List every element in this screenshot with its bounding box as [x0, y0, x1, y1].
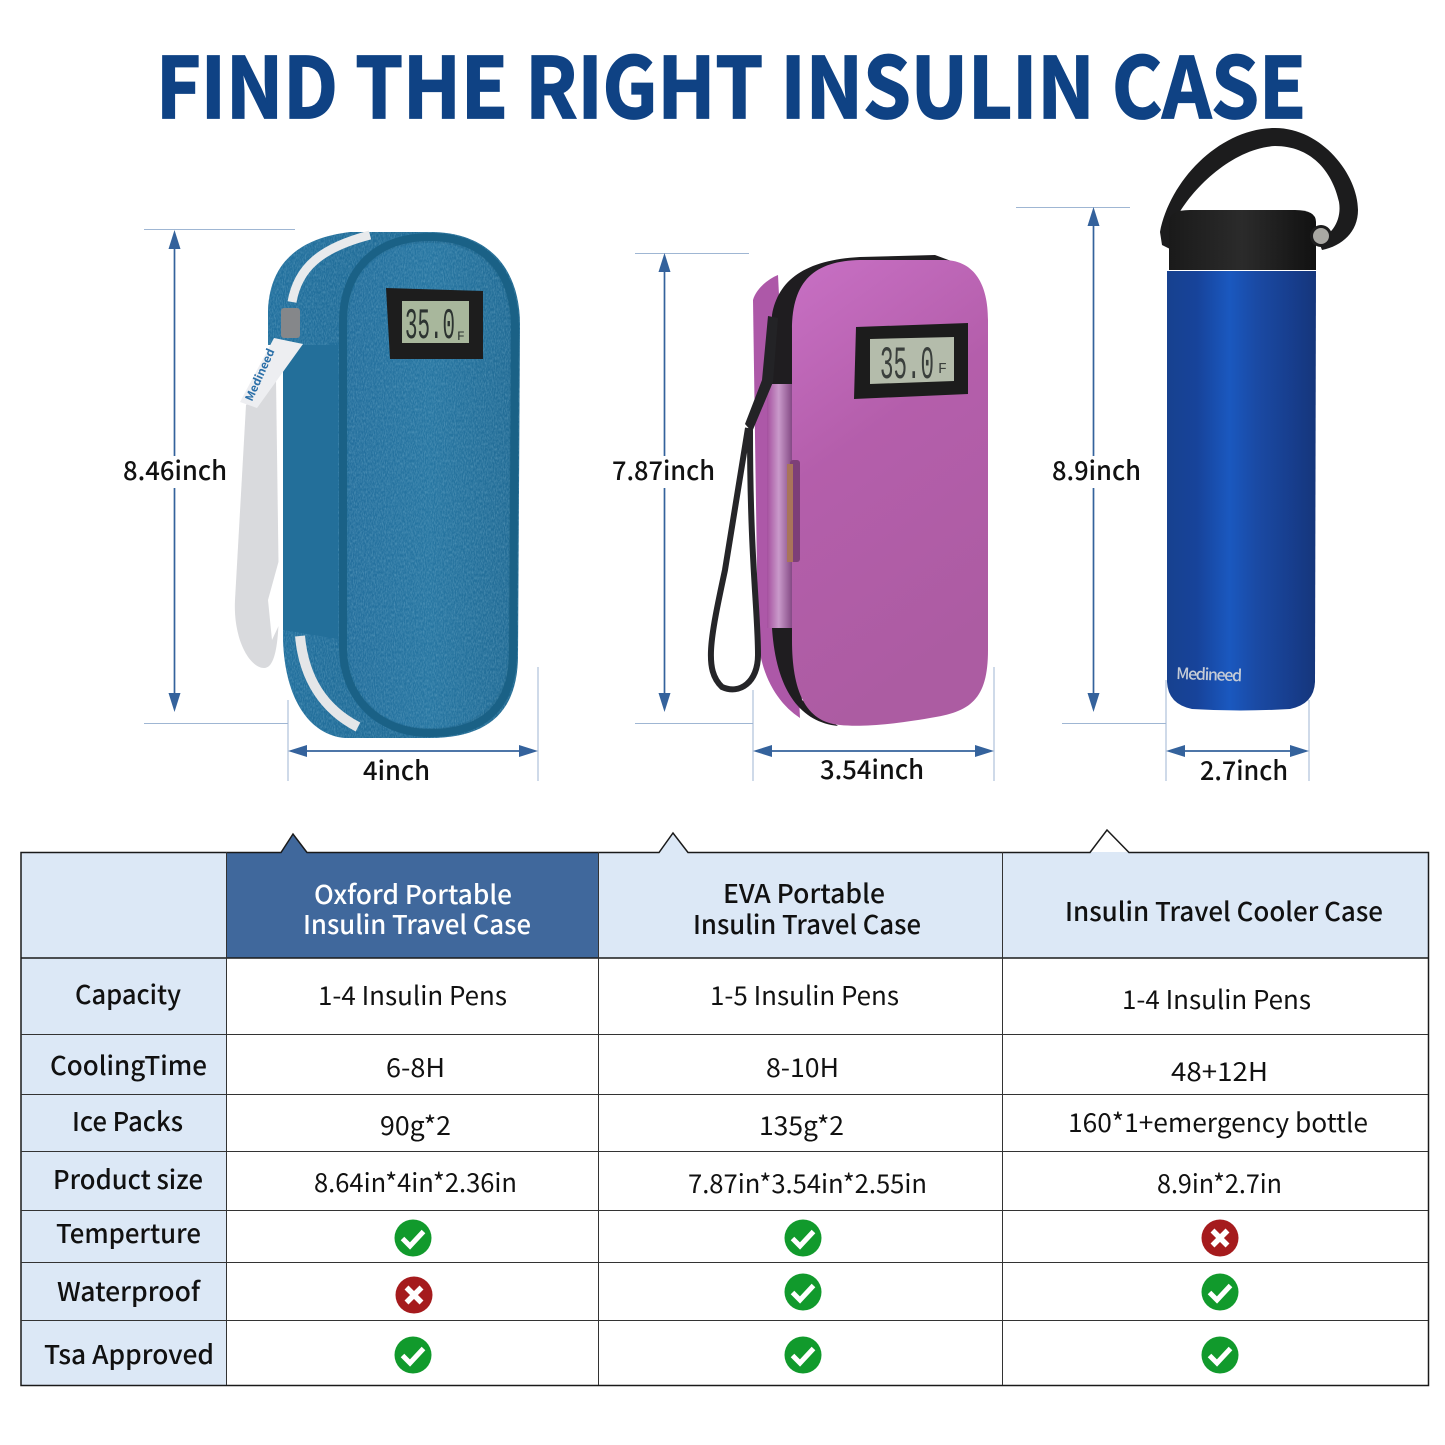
width arrow	[763, 750, 984, 752]
row: waterproof	[57, 1272, 1238, 1314]
handle	[1160, 128, 1358, 250]
title: FIND THE RIGHT INSULIN CASE	[156, 22, 1306, 143]
dimensions: blue oxford case	[123, 230, 538, 788]
thermometer: 35.0	[880, 340, 934, 392]
width label: 2.7inch	[1200, 751, 1288, 788]
row: capacity	[75, 975, 1311, 1017]
row: cooling time: 8-10H	[766, 1048, 839, 1085]
product: blue oxford case	[235, 228, 524, 742]
row: cooling time: CoolingTime	[50, 1046, 207, 1083]
front panel	[349, 243, 510, 728]
row: capacity: 1-4 Insulin Pens	[318, 976, 507, 1013]
row: cooling time: 48+12H	[1171, 1052, 1268, 1089]
row: product size: 8.9in*2.7in	[1157, 1164, 1282, 1201]
width arrow	[298, 750, 528, 752]
width arrow	[1176, 750, 1299, 752]
row: waterproof: Waterproof	[57, 1272, 201, 1309]
thermometer	[386, 288, 483, 359]
dimensions: purple EVA case	[612, 253, 994, 787]
zipper bottom	[300, 636, 358, 727]
wrist strap	[711, 428, 758, 689]
zipper top	[292, 235, 370, 302]
column header: oxford: Insulin Travel Case	[303, 905, 531, 942]
row: capacity: 1-4 Insulin Pens	[1122, 980, 1311, 1017]
row: product size: Product size	[53, 1160, 203, 1197]
height label: 8.9inch	[1052, 451, 1141, 488]
thermometer: 35.0	[405, 302, 455, 352]
width label: 3.54inch	[820, 750, 924, 787]
row: product size	[53, 1160, 1282, 1201]
table fills	[21, 852, 1428, 1385]
row: capacity: 1-5 Insulin Pens	[710, 976, 899, 1013]
wrist strap	[235, 378, 279, 668]
product: purple EVA case	[711, 255, 988, 726]
thermometer: F	[938, 361, 947, 378]
strap tab: Medineed	[241, 346, 278, 404]
side body	[753, 275, 800, 718]
row: cooling time	[50, 1046, 1268, 1089]
column header: EVA: EVA Portable	[723, 874, 885, 911]
row: ice packs: 135g*2	[759, 1106, 844, 1143]
zipper pull	[281, 308, 300, 338]
row: tsa approved	[44, 1335, 1238, 1374]
tan tag	[787, 460, 800, 562]
column header: oxford	[303, 875, 531, 942]
thermometer: F	[457, 329, 465, 344]
rivet	[1310, 225, 1332, 247]
lid	[1169, 210, 1316, 270]
height arrow	[1092, 217, 1094, 702]
width label: 4inch	[363, 751, 430, 788]
row: temperature: Temperture	[56, 1214, 201, 1251]
brand: Medineed	[1176, 660, 1243, 686]
strap hole	[268, 560, 279, 640]
dimensions: blue travel bottle	[1016, 207, 1309, 788]
row: ice packs	[72, 1102, 1368, 1143]
front panel piping	[343, 237, 515, 733]
height label: 7.87inch	[612, 451, 715, 488]
row: ice packs: 90g*2	[380, 1106, 451, 1143]
row: product size: 8.64in*4in*2.36in	[314, 1163, 517, 1200]
column header: oxford: Oxford Portable	[314, 875, 512, 912]
strap tab	[240, 338, 303, 408]
lower black band	[772, 628, 838, 726]
column header: cooler: Insulin Travel Cooler Case	[1065, 892, 1383, 929]
side pocket	[283, 345, 338, 639]
bottle body	[1167, 271, 1316, 710]
row: product size: 7.87in*3.54in*2.55in	[688, 1164, 927, 1201]
case silhouette	[268, 232, 520, 738]
height label: 8.46inch	[123, 451, 227, 488]
row: temperature	[56, 1214, 1238, 1256]
header tabs	[281, 830, 1129, 852]
thermometer	[854, 323, 968, 399]
zipper pull	[745, 316, 778, 432]
row: ice packs: 160*1+emergency bottle	[1068, 1103, 1368, 1140]
row: cooling time: 6-8H	[386, 1048, 445, 1085]
black zipper band	[770, 255, 962, 384]
grid lines	[21, 830, 1428, 1386]
column header: EVA	[693, 874, 921, 942]
height arrow	[664, 263, 666, 702]
fabric texture	[262, 228, 524, 742]
row: ice packs: Ice Packs	[72, 1102, 183, 1139]
side pocket	[767, 384, 793, 628]
column header: EVA: Insulin Travel Case	[693, 905, 921, 942]
height arrow	[174, 240, 176, 702]
comparison table	[21, 830, 1428, 1386]
product: blue travel bottle	[1160, 128, 1358, 710]
row: tsa approved: Tsa Approved	[44, 1335, 214, 1372]
front panel	[792, 260, 988, 726]
row: capacity: Capacity	[75, 975, 181, 1012]
